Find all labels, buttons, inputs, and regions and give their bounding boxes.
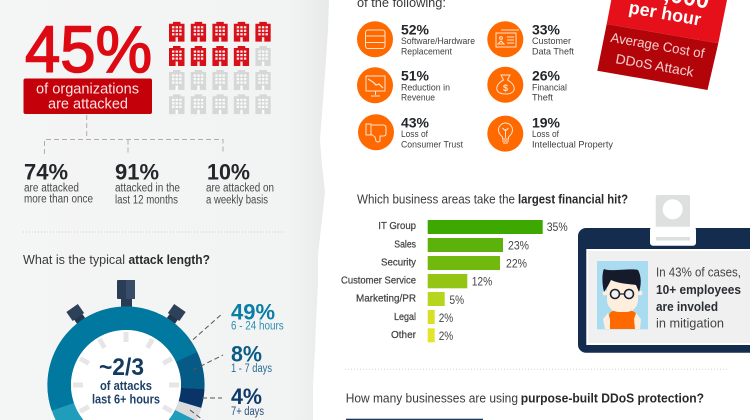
center text: about 2/3 of attacks last 6+ hours: of attacks — [100, 378, 152, 393]
icon: money bag — [487, 67, 523, 103]
item: 33% customer data theft: 33% — [532, 21, 561, 37]
building icon grid: 9 of 20 red — [169, 22, 271, 114]
icon: thumbs down — [358, 114, 394, 150]
text: in 43% of cases 10+ employees are involved in mitigation: are involed — [656, 299, 718, 314]
value labels: 2% — [439, 331, 453, 343]
stat: 4% 7+ days: 4% — [231, 384, 262, 409]
red label: of organizations are attacked: are attacked — [48, 96, 128, 112]
item: 33% customer data theft: Data Theft — [532, 46, 574, 57]
icon: light bulb — [487, 116, 523, 152]
dashed connector to three stats — [44, 115, 223, 154]
stat: 49% 6-24 hours: 6 - 24 hours — [231, 320, 284, 332]
text: in 43% of cases 10+ employees are involved in mitigation: in mitigation — [656, 316, 724, 331]
heading: purpose-built protection — [346, 390, 704, 405]
bars — [428, 220, 543, 342]
icon: server — [357, 21, 393, 57]
stopwatch face with ticks — [71, 330, 181, 420]
item: 43% loss of consumer trust: 43% — [401, 115, 430, 131]
center text: about 2/3 of attacks last 6+ hours: ~2/3 — [99, 354, 144, 381]
item: 19% loss of intellectual property: 19% — [532, 115, 561, 131]
stat: 91%: attacked in the — [115, 183, 180, 195]
icon: stopwatch side buttons — [66, 304, 186, 328]
panel: ID badge — [578, 195, 750, 353]
item: 52% software/hardware replacement: Replacement — [401, 46, 452, 57]
item: 33% customer data theft — [532, 21, 574, 57]
stat: 10% — [206, 160, 274, 206]
text: in 43% of cases 10+ employees are involved in mitigation — [656, 265, 741, 331]
heading: financial hit: Which business areas take the — [357, 191, 515, 206]
category labels — [341, 220, 417, 341]
item: 26% financial theft: Theft — [532, 93, 553, 104]
value labels: 35% — [547, 222, 568, 234]
big stat: 45%: 45% — [25, 12, 152, 86]
stat: 91% — [115, 160, 180, 206]
category labels: Other — [391, 329, 416, 341]
icon: customer data card — [487, 21, 523, 57]
heading: financial hit: largest financial hit? — [518, 191, 628, 206]
value labels: 5% — [450, 295, 464, 307]
category labels: IT Group — [378, 220, 416, 232]
value labels: 23% — [508, 240, 529, 252]
center text: about 2/3 of attacks last 6+ hours — [92, 354, 160, 406]
value labels: 22% — [506, 259, 527, 271]
category labels: Marketing/PR — [356, 293, 416, 305]
donut segments — [59, 318, 193, 420]
value labels: 2% — [439, 313, 453, 325]
item: 43% loss of consumer trust — [401, 115, 463, 151]
text: average cost of DDoS attack: Average Cost of — [609, 30, 706, 61]
icon: money bag: $ — [503, 83, 508, 93]
stat: 10%: a weekly basis — [206, 194, 268, 206]
stat: 74%: 74% — [24, 160, 68, 184]
chart: stopwatch donut — [59, 280, 193, 420]
text: in 43% of cases 10+ employees are involved in mitigation: In 43% of cases, — [656, 265, 741, 280]
item: 52% software/hardware replacement — [401, 21, 475, 57]
heading: attack length: attack length? — [128, 252, 210, 267]
stat: 10%: are attacked on — [206, 183, 274, 195]
text: average cost of DDoS attack: DDoS Attack — [614, 51, 695, 80]
stat: 74% — [24, 160, 93, 206]
badge body — [578, 228, 750, 353]
item: 51% reduction in revenue: Revenue — [401, 93, 435, 104]
panel: red cost banner — [597, 0, 729, 90]
badge card — [587, 250, 750, 344]
icon: badge clip — [650, 195, 696, 246]
panel: left torn page background — [0, 0, 329, 420]
stat: 91%: last 12 months — [115, 194, 178, 206]
item: 26% financial theft: Financial — [532, 82, 567, 93]
item: 52% software/hardware replacement: 52% — [401, 21, 430, 37]
heading: purpose-built protection: purpose-built DDoS protection? — [521, 390, 704, 405]
red label: of organizations are attacked: of organizations — [36, 80, 139, 98]
stat: 49% 6-24 hours: 49% — [231, 299, 275, 324]
red label: of organizations are attacked — [24, 78, 152, 114]
stat: 8% 1-7 days — [231, 342, 272, 375]
value labels: 12% — [472, 277, 492, 289]
heading: attack length — [23, 252, 210, 267]
category labels: Sales — [394, 238, 416, 250]
category labels: Legal — [394, 311, 416, 323]
item: 26% financial theft: 26% — [532, 67, 561, 83]
item: 19% loss of intellectual property: Intellectual Property — [532, 140, 613, 151]
item: 19% loss of intellectual property: Loss of — [532, 129, 559, 140]
category labels: Customer Service — [341, 275, 416, 287]
stat: 10%: 10% — [207, 160, 250, 184]
stat: 74%: are attacked — [24, 183, 79, 195]
bar: protection chart top edge — [346, 419, 483, 420]
icon: stopwatch crown — [117, 280, 135, 308]
center text: about 2/3 of attacks last 6+ hours: last 6+ hours — [92, 392, 160, 406]
category labels: Security — [381, 256, 417, 268]
item: 51% reduction in revenue: 51% — [401, 67, 430, 83]
panel: attack prevalence — [24, 12, 274, 206]
stat: 91%: 91% — [115, 160, 159, 184]
value labels — [439, 222, 568, 343]
item: 19% loss of intellectual property — [532, 115, 613, 151]
heading: attack length: What is the typical — [23, 252, 125, 267]
callouts: attack length legend — [187, 299, 284, 420]
stat: 4% 7+ days: 7+ days — [231, 406, 264, 418]
stat: 49% 6-24 hours — [231, 299, 284, 332]
text: in 43% of cases 10+ employees are involved in mitigation: 10+ employees — [656, 282, 741, 297]
heading: purpose-built protection: How many businesses are using — [346, 390, 518, 405]
icon: falling revenue chart — [357, 67, 393, 103]
item: 33% customer data theft: Customer — [532, 36, 571, 47]
item: 52% software/hardware replacement: Software/Hardware — [401, 36, 475, 47]
item: 43% loss of consumer trust: Consumer Trust — [401, 140, 463, 151]
icon: person portrait — [597, 261, 648, 329]
text: average cost of DDoS attack — [609, 30, 706, 80]
chart: business areas bar chart — [341, 220, 568, 343]
stat: 74%: more than once — [24, 194, 93, 206]
heading: financial hit — [357, 191, 628, 206]
panel: consequences grid — [357, 21, 613, 152]
item: 43% loss of consumer trust: Loss of — [401, 129, 428, 140]
item: 51% reduction in revenue: Reduction in — [401, 82, 450, 93]
item: 26% financial theft — [532, 67, 567, 104]
stat: 8% 1-7 days: 8% — [231, 342, 262, 367]
stat: 8% 1-7 days: 1 - 7 days — [231, 363, 272, 375]
item: 51% reduction in revenue — [401, 67, 450, 104]
